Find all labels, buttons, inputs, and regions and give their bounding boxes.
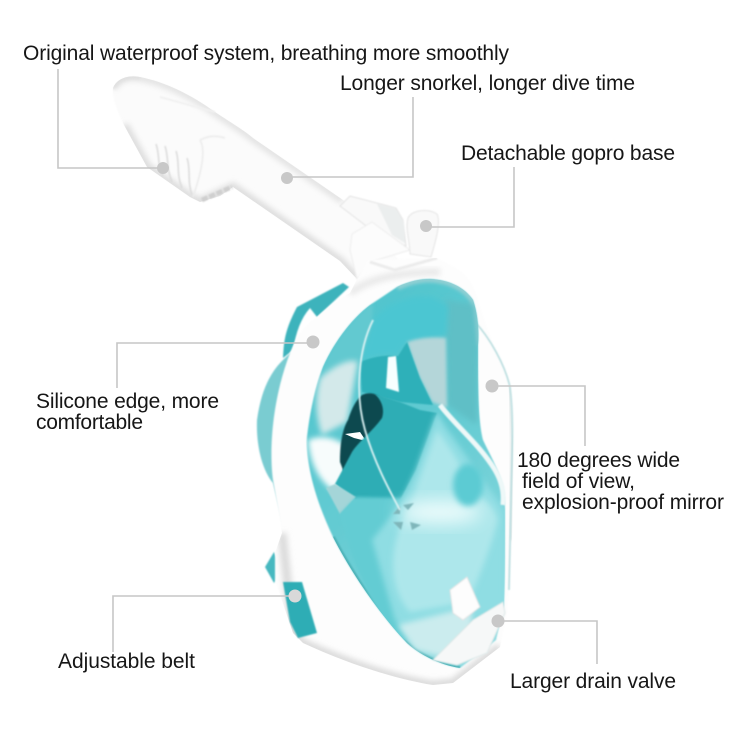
white glint: [345, 432, 364, 440]
upper teal: [365, 298, 448, 358]
pale grey lower step: [326, 484, 356, 514]
mask white frame: [271, 258, 513, 685]
frame body: [271, 258, 513, 685]
snorkel collar clip: [340, 196, 410, 279]
valve stem: [450, 577, 480, 620]
white gap: [386, 356, 399, 392]
label: field of view: explosion-proof mirror: [522, 491, 724, 514]
lens base: [307, 279, 505, 668]
teal round shadow: [453, 464, 483, 506]
snorkel vent ribs: [156, 97, 232, 200]
grey highlight panel: [407, 337, 447, 408]
vent triangles: [393, 503, 421, 530]
label: drain valve: Larger drain valve: [510, 670, 676, 693]
lens: [307, 279, 505, 668]
label: original waterproof system: Original waterproof system, breathing more smoothly: [23, 42, 510, 65]
snorkel tube: [113, 76, 356, 278]
right teal band: [445, 300, 478, 425]
lens dark rim: [333, 537, 460, 668]
centre seam line: [359, 320, 400, 510]
dark inner shadow: [340, 393, 386, 475]
light centre panel: [372, 412, 505, 640]
left rim band: [322, 303, 373, 380]
snorkel shading: [113, 76, 357, 279]
frame shading: [282, 258, 513, 685]
label: adjustable belt: Adjustable belt: [58, 650, 195, 673]
leader dots: [157, 162, 504, 628]
teal rear strap: [257, 283, 349, 583]
label: longer snorkel: Longer snorkel, longer dive time: [340, 72, 635, 95]
clear visor rim: [475, 322, 512, 590]
snorkel top valve: [113, 76, 400, 279]
label: silicone edge: [36, 390, 219, 434]
leader lines: [58, 69, 597, 664]
drain valve: [433, 577, 505, 665]
label: gopro base: Detachable gopro base: [461, 142, 675, 165]
left pale cheek reflection: [316, 361, 358, 435]
label: field of view: 180 degrees wide: [517, 449, 680, 472]
teal nose pocket: [335, 394, 437, 508]
adjustable belt buckle: [283, 582, 317, 638]
rear pad: [257, 352, 292, 530]
label: field of view: field of view,: [522, 470, 635, 493]
gopro base mount: [407, 211, 438, 257]
label: field of view: [517, 449, 724, 514]
lower pale chin cup: [398, 607, 472, 658]
label: silicone edge: comfortable: [36, 411, 143, 434]
visor fold highlight: [440, 405, 503, 505]
label: silicone edge: Silicone edge, more: [36, 390, 219, 413]
mid teal chin panel: [340, 497, 410, 640]
top strap loop: [283, 283, 349, 358]
lower strap: [265, 552, 282, 583]
mid teal band left of panel: [360, 342, 433, 405]
valve body: [433, 602, 505, 665]
